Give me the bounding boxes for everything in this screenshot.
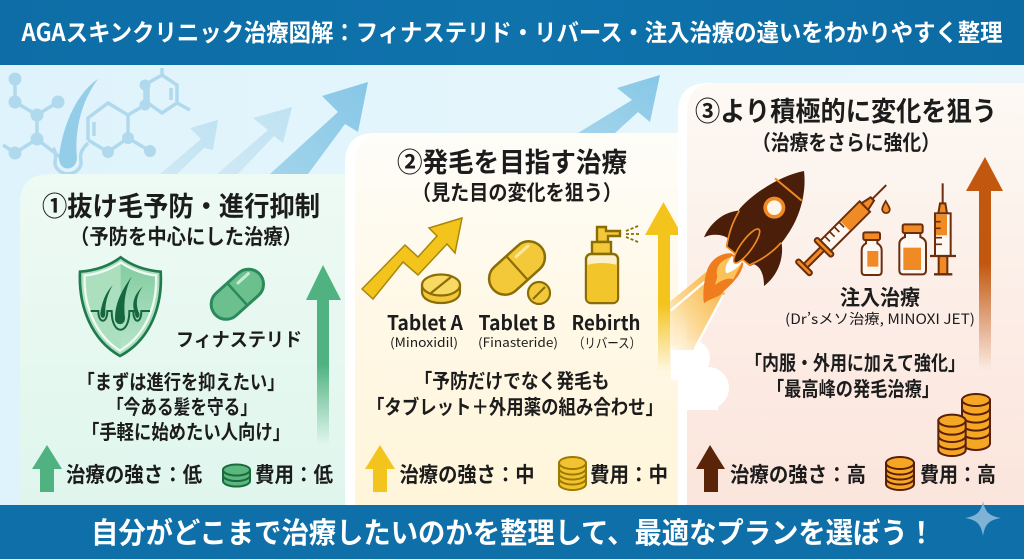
label: tablet B: Tablet B <box>478 307 556 336</box>
icon: coins green <box>223 464 250 487</box>
icon: sparkle <box>965 501 1001 536</box>
panel 1 subheading: （予防を中心にした治療） <box>70 221 302 251</box>
label: rebirth: Rebirth <box>572 307 640 336</box>
footer bar <box>0 501 1024 559</box>
quotes: panel 1: 「手軽に始めたい人向け」 <box>82 416 290 445</box>
strength arrow: green <box>306 265 341 445</box>
icon: tablet A <box>422 274 460 303</box>
quotes: panel 3 <box>745 347 965 402</box>
quotes: panel 1: 「今ある髪を守る」 <box>107 391 257 420</box>
icon: small strength arrow yellow <box>365 445 395 492</box>
icon: shield with hair follicles <box>80 257 161 356</box>
quotes: panel 3: 「内服・外用に加えて強化」 <box>745 347 965 376</box>
quotes: panel 2 <box>367 365 663 420</box>
label: rebirth: （リバース） <box>573 332 641 352</box>
icon: coins orange <box>886 457 914 490</box>
quotes: panel 1 <box>78 366 290 445</box>
panel 1: hair loss prevention <box>20 174 345 505</box>
label: injection therapy <box>785 282 975 329</box>
label: cost mid: 費用：中 <box>590 459 668 489</box>
panel 2: hair growth treatment <box>345 133 690 505</box>
background: molecule and hair illustration <box>3 68 190 174</box>
icon: coins yellow <box>559 457 586 490</box>
label: tablet B <box>478 307 558 351</box>
header bar <box>0 0 1024 65</box>
icon: capsule B <box>483 235 551 304</box>
strength arrow: orange <box>966 157 1003 370</box>
panel 2 heading: ②発毛を目指す治療 <box>397 141 627 180</box>
label: strength mid: 治療の強さ：中 <box>400 459 534 489</box>
label: injection therapy: (Dr’sメソ治療, MINOXI JET) <box>785 309 975 329</box>
label: cost high: 費用：高 <box>920 459 996 489</box>
icon: syringes and vials <box>794 177 956 277</box>
icon: capsule <box>205 263 270 325</box>
label: injection therapy: 注入治療 <box>840 282 920 312</box>
quotes: panel 2: 「タブレット＋外用薬の組み合わせ」 <box>367 391 663 420</box>
panel 1 heading: ①抜け毛予防・進行抑制 <box>42 185 320 224</box>
quotes: panel 3: 「最高峰の発毛治療」 <box>767 373 939 402</box>
panel 3 subheading: （治療をさらに強化） <box>752 127 940 157</box>
label: cost low: 費用：低 <box>255 459 333 489</box>
label: strength low: 治療の強さ：低 <box>66 459 202 489</box>
icon: small strength arrow green <box>32 445 62 492</box>
background: rising arrows <box>160 75 660 174</box>
icon: coin stacks <box>938 394 990 456</box>
label: tablet B: (Finasteride) <box>478 332 558 351</box>
label: finasteride: フィナステリド <box>176 325 302 352</box>
label: strength high: 治療の強さ：高 <box>730 459 866 489</box>
icon: spray bottle <box>586 226 640 303</box>
label: rebirth <box>572 307 641 352</box>
label: tablet A: Tablet A <box>387 307 463 336</box>
icon: rocket with flame <box>670 171 805 350</box>
panel 2 subheading: （見た目の変化を狙う） <box>412 177 622 207</box>
panel 3: aggressive treatment <box>670 83 1024 505</box>
smoke cloud <box>671 340 729 410</box>
quotes: panel 1: 「まずは進行を抑えたい」 <box>78 366 284 395</box>
strength arrow: yellow <box>645 202 682 372</box>
label: tablet A: (Minoxidil) <box>390 332 458 351</box>
icon: zigzag arrow <box>362 218 462 299</box>
footer message: 自分がどこまで治療したいのかを整理して、最適なプランを選ぼう！ <box>91 510 935 552</box>
panel 3 heading: ③より積極的に変化を狙う <box>695 90 997 129</box>
icon: small strength arrow brown <box>696 445 725 492</box>
label: tablet A <box>387 307 463 351</box>
quotes: panel 2: 「予防だけでなく発毛も <box>414 365 610 394</box>
